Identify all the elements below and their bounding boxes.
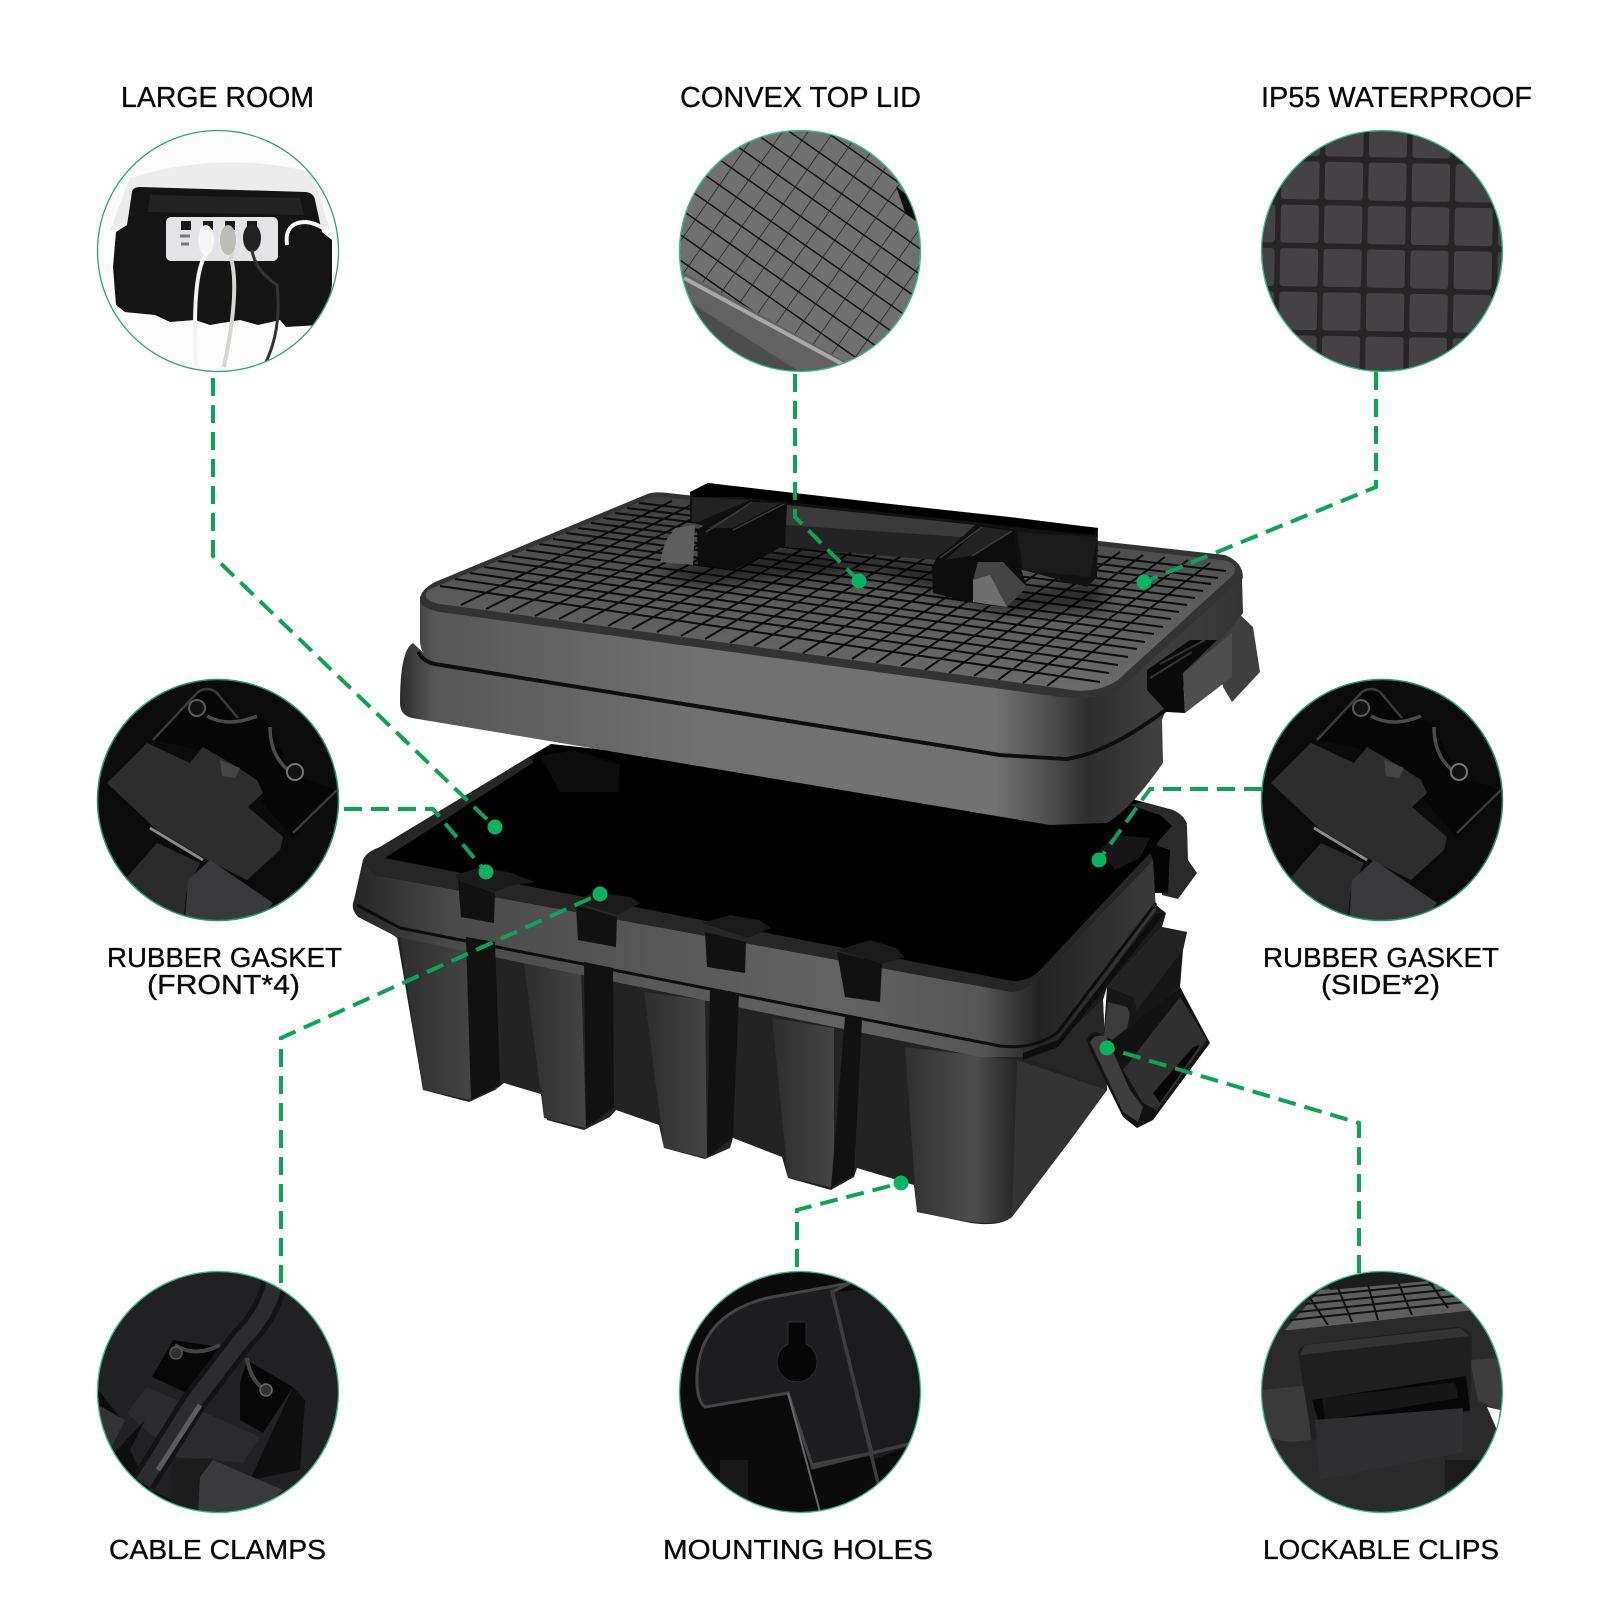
right latch <box>932 525 1027 607</box>
label: rubber gasket side: RUBBER GASKET <box>1263 942 1499 973</box>
circle outline: convex top lid <box>680 130 920 372</box>
circle photo: convex top lid <box>680 131 925 375</box>
label: rubber gasket front: (FRONT*4) <box>147 969 300 1000</box>
product: lower box body <box>353 744 1210 1224</box>
right gasket <box>1100 835 1150 870</box>
circle photo: large room <box>110 162 332 368</box>
callout line: convex top lid <box>795 374 866 588</box>
circle outline: large room <box>98 130 338 372</box>
heading: large room: LARGE ROOM <box>121 82 314 114</box>
circle photo: mounting holes <box>680 1272 925 1512</box>
circle photo: lockable clips <box>1262 1272 1502 1512</box>
callout line: rubber gasket side <box>1092 789 1262 868</box>
callout line: lockable clips <box>1100 1040 1359 1273</box>
open latch <box>1087 987 1210 1128</box>
back right rim <box>1130 802 1197 899</box>
center handle face <box>785 505 975 560</box>
right side clip <box>1147 640 1217 713</box>
product: lid <box>400 483 1260 825</box>
upper wall <box>420 578 1243 757</box>
label: rubber gasket front: RUBBER GASKET <box>107 942 342 973</box>
circle photo: cable clamps <box>98 1272 338 1512</box>
circle outline: mounting holes <box>680 1272 920 1512</box>
front straps <box>458 880 500 1100</box>
heading: IP55 waterproof: IP55 WATERPROOF <box>1261 82 1532 114</box>
interior <box>354 744 1187 1043</box>
clip mount plate <box>1103 927 1187 1067</box>
heading: convex top lid: CONVEX TOP LID <box>680 82 921 114</box>
right flange <box>1215 610 1260 702</box>
gasket tabs <box>455 867 535 892</box>
handle tray <box>690 483 1098 587</box>
circle photo: rubber gasket side <box>1262 680 1502 922</box>
circle outline: rubber gasket side <box>1262 680 1502 920</box>
label: rubber gasket side <box>1263 942 1499 1000</box>
circle outline: cable clamps <box>98 1272 338 1512</box>
label: lockable clips: LOCKABLE CLIPS <box>1263 1534 1499 1565</box>
callout line: rubber gasket front <box>344 809 494 880</box>
circle outline: IP55 waterproof <box>1262 130 1502 372</box>
lower wall with teeth <box>397 937 1107 1224</box>
gap filler between rim and clip plate <box>1058 905 1166 1043</box>
left latch <box>697 500 785 570</box>
callout line: cable clamps <box>281 886 608 1283</box>
callout line: mounting holes <box>797 1176 908 1267</box>
circle outline: rubber gasket front <box>98 680 338 920</box>
rim <box>353 860 1156 1057</box>
label: mounting holes: MOUNTING HOLES <box>663 1534 933 1565</box>
label: cable clamps: CABLE CLAMPS <box>109 1534 326 1565</box>
label: rubber gasket front <box>107 942 342 1000</box>
groove <box>418 652 1167 759</box>
tooth faces <box>400 938 472 1100</box>
textured grid of squares <box>420 490 1250 700</box>
callout line: large room <box>213 378 502 834</box>
circle outline: lockable clips <box>1262 1272 1502 1512</box>
callout line: IP55 waterproof <box>1136 372 1376 590</box>
circle photo: IP55 waterproof <box>1262 131 1502 371</box>
label: rubber gasket side: (SIDE*2) <box>1321 969 1440 1000</box>
circle photo: rubber gasket front <box>98 680 338 922</box>
top surface rim <box>420 492 1243 698</box>
flange wall <box>400 643 1167 825</box>
